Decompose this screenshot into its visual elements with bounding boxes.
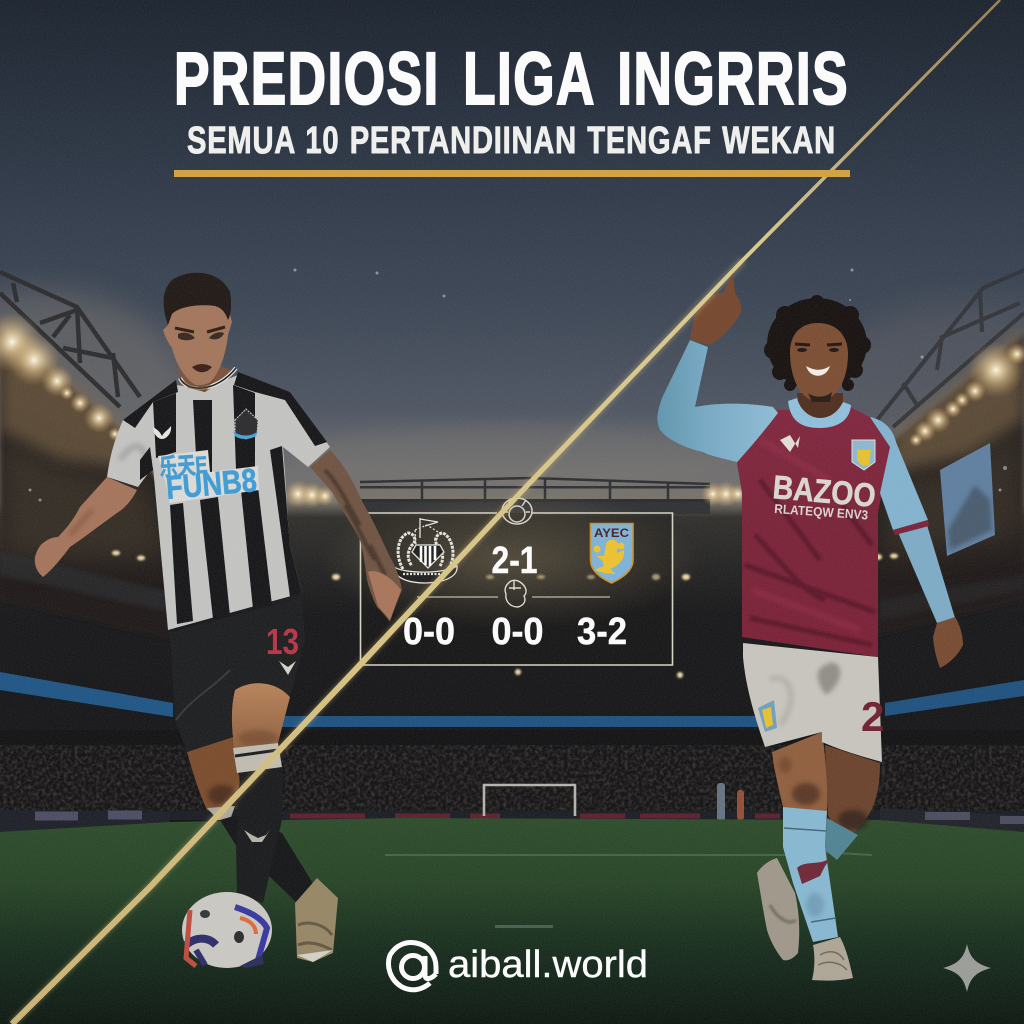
right stand underside [860,335,1024,640]
shorts number 13: 13 [266,621,299,662]
score 2-1: 2-1 [492,540,538,582]
crowd [0,730,1024,825]
shorts number: 2 [861,693,884,740]
lower stand band [0,552,170,612]
ball [182,892,272,968]
advertising boards [0,808,1024,832]
raised fingertip over line [715,273,735,305]
player: Aston Villa [657,273,963,981]
raised hand [690,273,742,345]
shirt stripes [123,372,327,624]
gold underline [174,170,850,177]
far stand roof [360,478,710,514]
logo: aiball.world [388,942,648,990]
left sleeve [657,340,778,462]
score 3-2: 3-2 [577,611,627,653]
collar [788,398,851,428]
front thigh [772,732,827,812]
long under-sleeve [897,525,955,623]
sock tape [233,743,282,773]
face [790,323,848,402]
score 0-0 middle: 0-0 [492,611,544,653]
front sock [783,807,838,942]
left truss [0,272,140,407]
neck [178,360,236,392]
distant players [717,783,744,821]
right banner [940,443,995,556]
kit logo [780,435,800,452]
front sock [236,768,283,903]
right arm [310,450,402,622]
dust specks [28,268,1007,502]
icon: Aston Villa crest [590,524,633,583]
left stand underside [0,330,172,640]
back leg [825,745,880,834]
front thigh [232,681,290,748]
goal [484,785,575,816]
panel border [360,513,672,665]
subtitle: SEMUA 10 PERTANDIINAN TENGAF WEKAN [187,120,836,162]
front boot [812,937,853,981]
club badge [233,409,258,439]
shorts [743,643,884,762]
small stand lamps [112,550,898,678]
right truss [877,270,1024,427]
back calf [220,815,317,903]
icon: Newcastle crest [394,518,457,583]
right sleeve [870,417,928,530]
shorts [170,598,305,752]
torso [737,407,890,657]
score 0-0 left: 0-0 [403,611,455,653]
right hand [933,617,963,668]
arm tattoo [325,470,385,575]
back thigh [187,737,240,820]
player: Newcastle [35,273,402,962]
sponsor top: 乐天E [159,452,208,482]
panel: match scores [360,498,672,665]
icon: top ball emblem [502,498,532,524]
shirt badge [852,440,875,470]
panel back glow [320,490,700,630]
icon: Aston Villa crest: AYEC [594,528,629,540]
back boot [757,858,799,960]
kit logo [153,426,171,439]
sponsor patch [158,450,259,503]
head [163,273,232,392]
icon: at sign [388,942,436,990]
hair [764,295,871,391]
floodlights [0,312,1024,508]
pitch [0,818,1024,1024]
divider [417,596,610,598]
sponsor BAZOO: BAZOO [771,468,877,514]
shirt folds [745,480,875,645]
left arm [35,477,137,577]
sponsor subline: RLATEQW ENV3 [774,501,869,523]
neck [797,393,843,420]
sky side haze [0,290,190,510]
wordmark: aiball.world [448,944,648,986]
shorts badge [758,700,777,732]
sponsor FUNB8: FUNB8 [164,461,258,506]
icon: sparkle [943,944,991,992]
back sock [825,818,858,860]
shirt body [107,375,330,630]
boot [295,878,338,962]
collar [180,368,236,388]
blue LED band [0,672,1024,727]
icon: Premier League lion [505,580,526,607]
